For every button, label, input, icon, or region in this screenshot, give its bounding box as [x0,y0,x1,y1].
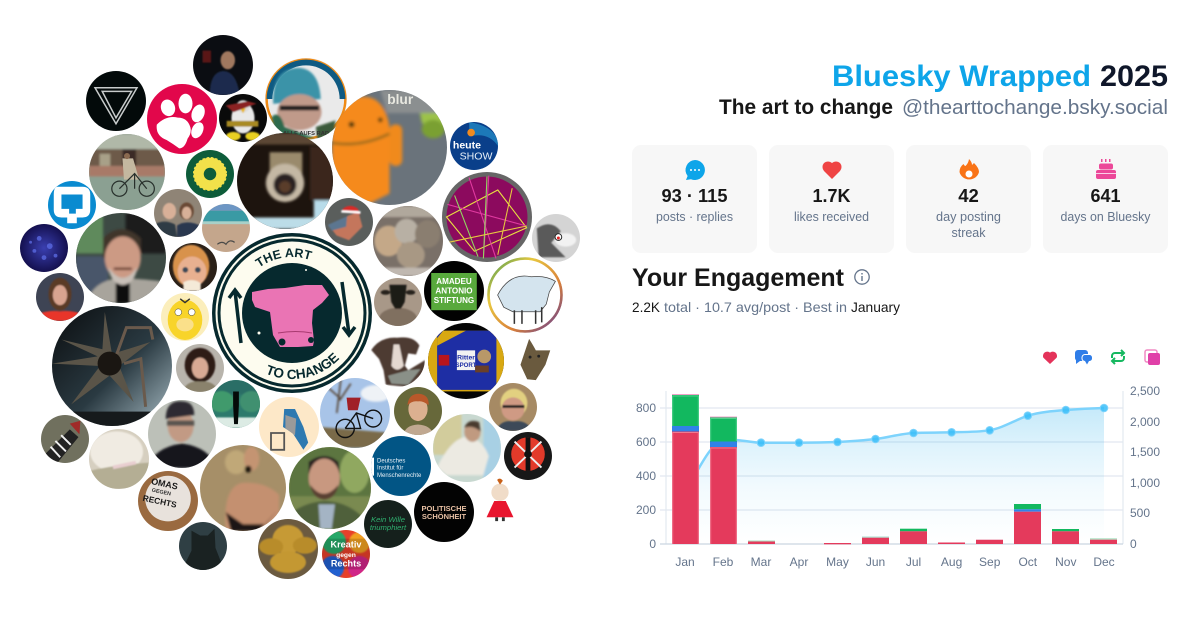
grid lines [660,391,1123,544]
avatar: Omas gegen Rechts: GEGEN [151,488,172,498]
avatar: antifa-style badge [504,432,552,480]
avatar: chocolate bar: SPORT [456,362,477,369]
cumulative line [685,408,1104,490]
avatar: Kein Wille triumphiert: Kein Wille [371,515,405,524]
right axis labels: 0 [1130,537,1137,551]
bar: Oct [1014,504,1041,544]
avatar: Kreativ gegen Rechts [321,530,371,579]
avatar: drawn pig in rainbow ring [487,257,563,333]
legend: likes heart [1043,352,1057,364]
avatar: Deutsches Institut: Deutsches [377,458,405,464]
avatar: man in green jacket [289,447,371,529]
engagement summary: 2.2K [632,299,661,315]
avatar: blonde woman from back [200,445,286,531]
engagement summary: January [851,299,900,315]
avatar: silhouette [212,380,260,428]
heading: Your Engagement: Your Engagement [632,264,845,292]
avatar: cat sticker [520,339,550,380]
avatar: mountain biker [320,378,391,448]
avatar: Amadeu Antonio Stiftung: ANTONIO [435,286,473,295]
avatar: smiling man [76,213,166,303]
avatar: black sheep [374,278,422,331]
icon: info [855,270,869,284]
avatar: Omas gegen Rechts: RECHTS [142,493,178,510]
month labels: Nov [1055,555,1076,569]
logo arrows [229,282,355,343]
avatar: sunflower [186,150,234,198]
avatar: fledermaus star creature [52,306,172,426]
avatar: vintage camera [237,133,333,229]
avatar: cartoon redhead [394,387,442,435]
icon: flame [960,159,979,179]
left axis labels: 800 [636,401,656,415]
line points [757,404,1108,447]
legend: reposts arrows [1112,350,1124,364]
title: Bluesky Wrapped [832,60,1091,93]
stat card: likes [769,145,894,253]
month labels: Jul [906,555,921,569]
avatar: two women [154,189,202,237]
month labels: Jun [866,555,885,569]
avatar: dark cat [179,522,227,570]
stat card: days [1043,145,1168,253]
stat card: streak: streak [952,225,986,240]
stat card: streak: day posting [936,209,1001,224]
month labels: Jan [675,555,695,569]
avatar: man with cap [148,400,216,468]
avatar: heute show [450,122,498,170]
avatar: Kreativ gegen Rechts: Rechts [331,558,361,568]
avatar: Little My sticker [476,476,524,524]
avatar: man in white shirt [433,414,501,482]
chart legend [1043,350,1160,365]
avatar: Deutsches Institut [371,436,431,496]
avatar: dog [370,336,425,387]
stat card: days: 641 [1090,185,1120,206]
month labels: Oct [1018,555,1038,569]
avatar: white cat [89,429,149,489]
bar: Mar [748,540,775,544]
avatar: purple geometric pattern [442,172,532,262]
left axis labels [636,401,656,551]
logo creature [252,269,329,347]
left axis labels: 200 [636,503,656,517]
month labels [675,555,1115,569]
stat card: streak [906,145,1031,253]
avatar: Kein Wille triumphiert: triumphiert [370,523,407,532]
stat card: posts and replies [632,145,757,253]
avatar: psyduck [161,293,209,341]
icon: cake [1096,159,1116,179]
right axis labels: 500 [1130,506,1150,520]
avatar: heute show: SHOW [460,150,492,162]
avatar: Omas gegen Rechts: OMAS [150,476,179,492]
legend: replies bubbles [1075,350,1092,364]
month labels: Dec [1093,555,1115,569]
bar: Jul [900,529,927,544]
month labels: Mar [751,555,771,569]
central logo [212,233,372,393]
avatar: cartoon girl [169,243,217,291]
right axis labels: 1,000 [1130,476,1160,490]
icon: speech bubble [686,160,705,180]
bar: Jun [862,536,889,544]
logo text: THE ART [254,248,312,266]
month labels: Aug [941,555,962,569]
handle: @thearttochange.bsky.social [902,97,1168,119]
avatar: Kein Wille triumphiert [364,500,412,548]
month labels: May [826,555,849,569]
avatar: woman with glasses [489,383,537,431]
avatar: blue icon [48,181,96,229]
avatar: Amadeu Antonio Stiftung: STIFTUNG [434,296,474,305]
engagement summary: total · 10.7 avg/post · Best in [664,299,847,315]
avatar: Deutsches Institut: Menschenrechte [377,473,422,479]
avatar: striped stockings [41,415,89,463]
avatar: Politische Schönheit: POLITISCHE [421,504,467,513]
avatar: cyclist [89,134,165,210]
avatar: Android robot [332,90,447,205]
avatar: woman in red [36,273,84,321]
avatar: woman in blue knit hat [265,58,347,140]
stat card: streak: 42 [958,185,979,206]
avatar: blue glitter [20,224,68,272]
right axis labels: 2,000 [1130,415,1160,429]
right axis labels: 2,500 [1130,384,1160,398]
avatar: heute show: heute [453,139,481,151]
right axis labels [1130,384,1160,551]
avatar: pink paw [147,84,217,154]
avatar: Ganesha statue [258,519,318,579]
stat card: days: days on Bluesky [1060,209,1151,224]
stat card: likes: 1.7K [812,185,851,206]
avatar: triangle logo [86,71,146,131]
avatar: Politische Schönheit: SCHÖNHEIT [422,512,467,521]
bar: Nov [1052,529,1079,544]
avatar: Politische Schönheit [414,482,474,542]
bar: May [824,543,851,544]
avatar: Amadeu Antonio Stiftung: AMADEU [436,277,472,286]
bar: Feb [710,416,737,544]
month labels: Apr [790,555,808,569]
left axis labels: 400 [636,469,656,483]
avatar: man in dark shirt [193,35,253,95]
avatar: woman in blue knit hat: ALLE AUFS RAD [283,131,329,137]
avatar: kittens [373,206,443,276]
stat card: likes: likes received [794,209,869,224]
avatar: monochrome eye [532,214,580,262]
legend: quotes squares [1145,350,1160,365]
avatar: chocolate bar [428,323,504,399]
bar: Jan [672,394,699,544]
bar: Sep [976,539,1003,544]
title: 2025 [1100,60,1168,93]
left axis labels: 600 [636,435,656,449]
month labels: Feb [713,555,734,569]
avatar: Deutsches Institut: Institut für [377,466,403,472]
stacked bars [672,394,1117,544]
bar: Dec [1090,538,1117,544]
engagement chart [636,384,1160,569]
avatar: batman with walker [259,397,319,457]
avatar: Kreativ gegen Rechts: Kreativ [331,539,362,549]
avatar: Android robot: blur [387,92,414,107]
avatar: chocolate bar: Ritter [457,354,475,361]
cumulative area [685,408,1104,544]
avatar: beach [202,204,250,252]
month labels: Sep [979,555,1001,569]
stat card: posts and replies: 93 · 115 [662,185,728,206]
avatar: bullfinch with Santa hat [325,198,373,246]
right axis labels: 1,500 [1130,445,1160,459]
left axis labels: 0 [649,537,656,551]
avatar: Amadeu Antonio Stiftung [424,261,484,321]
display name: The art to change [719,96,893,119]
bar: Aug [938,542,965,544]
avatar: Kreativ gegen Rechts: gegen [336,552,356,559]
avatar: penguin [219,94,267,142]
icon: heart [822,161,842,179]
logo text [254,248,340,380]
avatar: Omas gegen Rechts [138,471,198,531]
avatar: woman with curly hair [176,344,224,392]
stat card: posts and replies: posts · replies [656,209,733,224]
avatar cluster [20,35,580,579]
logo text: TO CHANGE [268,352,340,380]
